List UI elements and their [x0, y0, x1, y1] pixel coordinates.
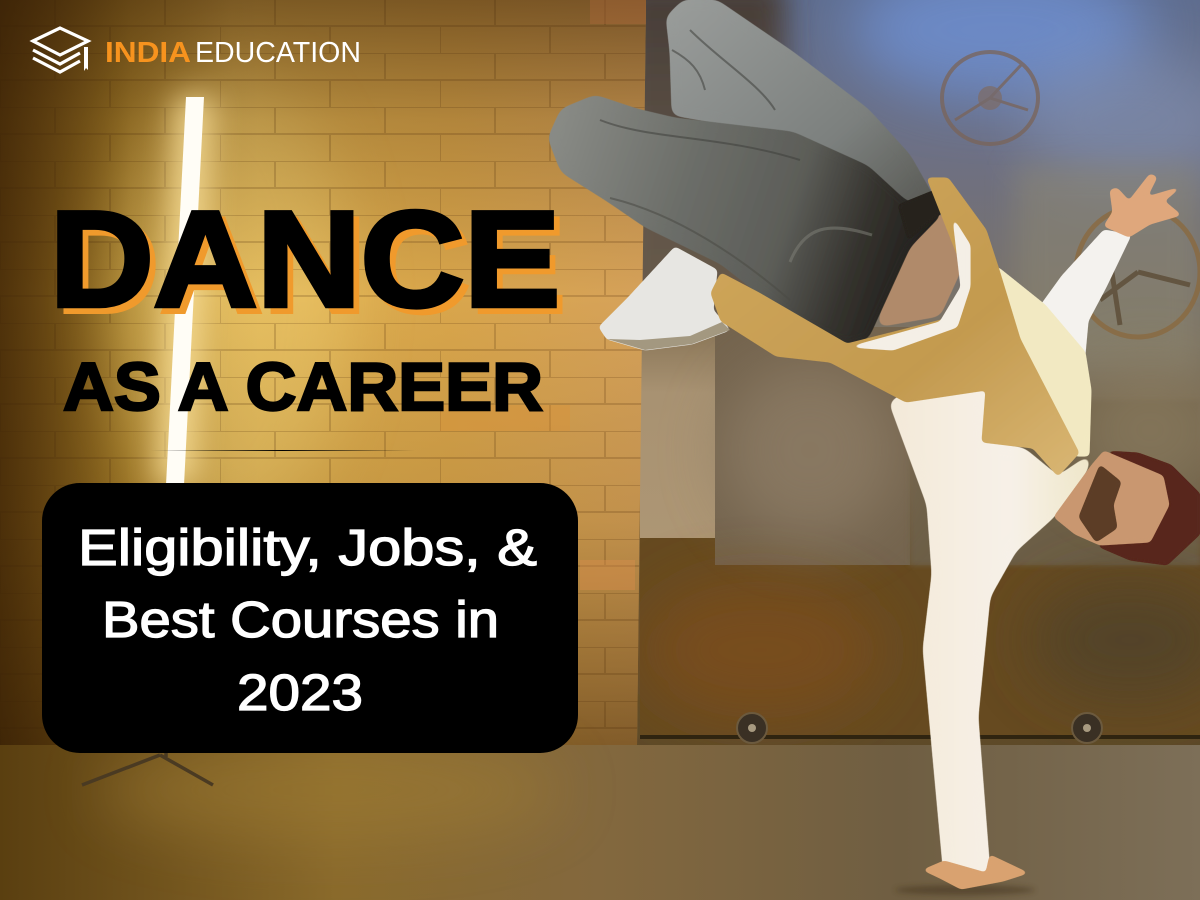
dancer: tied hoodie	[711, 178, 1079, 476]
dancer: cap	[1095, 451, 1200, 565]
dancer: face and neck	[1054, 451, 1169, 545]
dancer figure	[548, 0, 1200, 895]
callout text	[78, 519, 537, 721]
dancer: undershirt band	[850, 218, 970, 350]
dancer: shoulder sleeve	[995, 265, 1091, 456]
callout text: Best Courses in	[102, 591, 499, 648]
dancer: floor shadow	[895, 885, 1035, 895]
icon: film reel upper	[942, 52, 1038, 144]
logo	[33, 28, 361, 72]
dancer: shoe sole	[607, 322, 730, 350]
logo: EDUCATION	[195, 37, 361, 69]
background: brick wall	[0, 0, 646, 745]
dancer: lower jeans leg	[548, 95, 944, 344]
background: floor	[0, 740, 1200, 900]
icon: door wheels	[737, 713, 1102, 743]
logo wordmark: INDIA	[105, 37, 191, 69]
dancer: beard	[1079, 465, 1121, 542]
divider rule	[150, 450, 415, 451]
callout box	[42, 483, 578, 753]
subtitle: AS A CAREER: AS A CAREER	[63, 349, 543, 425]
dancer: raised hand	[1104, 174, 1181, 237]
dancer: floor hand	[923, 855, 1028, 889]
dancer: shoe	[599, 247, 730, 350]
dancer: torso and supporting arm	[889, 362, 1092, 878]
dancer: upper jeans leg	[666, 0, 936, 241]
dancer: jeans folds	[600, 30, 872, 300]
title: DANCE: DANCE	[56, 189, 566, 341]
light stand tripod	[82, 740, 213, 785]
callout text: 2023	[237, 664, 363, 721]
dancer: raised arm	[1036, 230, 1131, 365]
dancer: belt	[898, 190, 945, 240]
icon: film reel lower	[1076, 207, 1200, 337]
icon: graduation cap books	[33, 28, 88, 72]
dancer: skin at waist	[877, 212, 961, 327]
title: DANCE: DANCE	[50, 183, 560, 335]
callout text: Eligibility, Jobs, &	[78, 519, 537, 576]
background: concrete right wall	[620, 0, 1200, 750]
neon light tube	[156, 97, 214, 485]
